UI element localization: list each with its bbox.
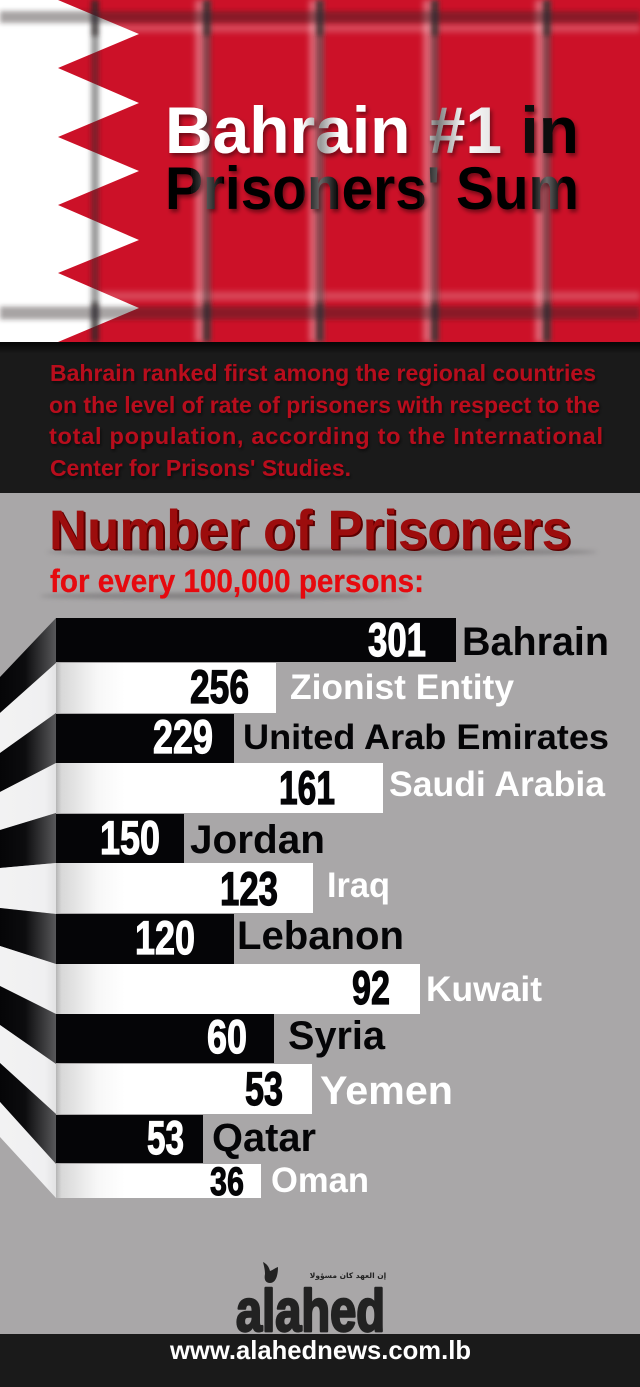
row: Oman 36 [56, 1160, 369, 1204]
subheading: for every 100,000 persons: [50, 563, 424, 599]
prison bars: pale halo [100, 0, 640, 342]
folded left edge of the ribbon [0, 618, 56, 1198]
bar chart: prisoners per 100,000 [0, 613, 609, 1204]
row: Bahrain 301: Bahrain [462, 620, 609, 664]
flag: red field [0, 0, 640, 342]
row: Jordan 150: 150 [100, 811, 160, 864]
logo tagline: إن العهد كان مسؤولا [310, 1271, 386, 1280]
row: United Arab Emirates 229: 229 [153, 710, 213, 763]
title line 1: Bahrain #1 in [165, 93, 579, 167]
logo wordmark: alahed [236, 1278, 385, 1344]
row: Lebanon 120: Lebanon [237, 914, 404, 958]
row: Yemen 53: 53 [245, 1062, 283, 1115]
footer band [0, 1334, 640, 1387]
banner: Bahrain flag behind prison bars [0, 0, 640, 342]
row: Syria 60: Syria [288, 1014, 386, 1058]
row: Saudi Arabia 161: 161 [279, 761, 335, 814]
prison bars: dark steel [0, 0, 640, 342]
logo: alahed [236, 1262, 386, 1344]
title [165, 93, 579, 222]
row: Iraq 123 [56, 862, 390, 915]
row: Zionist Entity 256: 256 [190, 660, 249, 713]
intro paragraph: Bahrain ranked first among the regional countries [50, 360, 596, 386]
row: Kuwait 92: 92 [352, 961, 390, 1014]
row: Lebanon 120: 120 [135, 911, 195, 964]
logo flame [263, 1262, 278, 1283]
row: Oman 36: Oman [271, 1161, 369, 1200]
intro paragraph: on the level of rate of prisoners with respect to the [49, 392, 600, 418]
row: Zionist Entity 256 [56, 660, 515, 713]
row: Kuwait 92: Kuwait [426, 970, 542, 1009]
row: Qatar 53: Qatar [212, 1116, 316, 1160]
row: Oman 36: 36 [210, 1160, 244, 1204]
row: Bahrain 301 [56, 613, 609, 666]
row: Saudi Arabia 161: Saudi Arabia [389, 765, 606, 804]
footer website address: www.alahednews.com.lb [169, 1335, 471, 1365]
row: Syria 60: 60 [207, 1010, 247, 1063]
row: Zionist Entity 256: Zionist Entity [290, 668, 515, 707]
panel: intro text band [0, 342, 640, 493]
chart heading [40, 498, 597, 599]
intro paragraph: total population, according to the International [49, 423, 603, 449]
row: Yemen 53 [56, 1062, 453, 1115]
row: United Arab Emirates 229 [56, 710, 609, 763]
row: Qatar 53 [56, 1111, 316, 1164]
heading: Number of Prisoners: Number of Prisoners [49, 498, 571, 561]
row: Lebanon 120 [56, 911, 404, 964]
row: Syria 60 [56, 1010, 386, 1063]
intro paragraph: Center for Prisons' Studies. [50, 455, 351, 481]
row: United Arab Emirates 229: United Arab Emirates [243, 718, 609, 757]
row: Iraq 123: Iraq [327, 866, 390, 905]
row: Bahrain 301: 301 [368, 613, 426, 666]
intro paragraph [49, 360, 603, 481]
row: Qatar 53: 53 [147, 1111, 184, 1164]
row: Jordan 150 [56, 811, 325, 864]
title line 2: Prisoners' Sum [165, 155, 579, 222]
row: Iraq 123: 123 [220, 862, 278, 915]
row: Yemen 53: Yemen [320, 1069, 453, 1113]
row: Kuwait 92 [56, 961, 542, 1014]
flag: white serrated band [0, 0, 139, 342]
row: Jordan 150: Jordan [190, 818, 325, 862]
row: Saudi Arabia 161 [56, 761, 606, 814]
